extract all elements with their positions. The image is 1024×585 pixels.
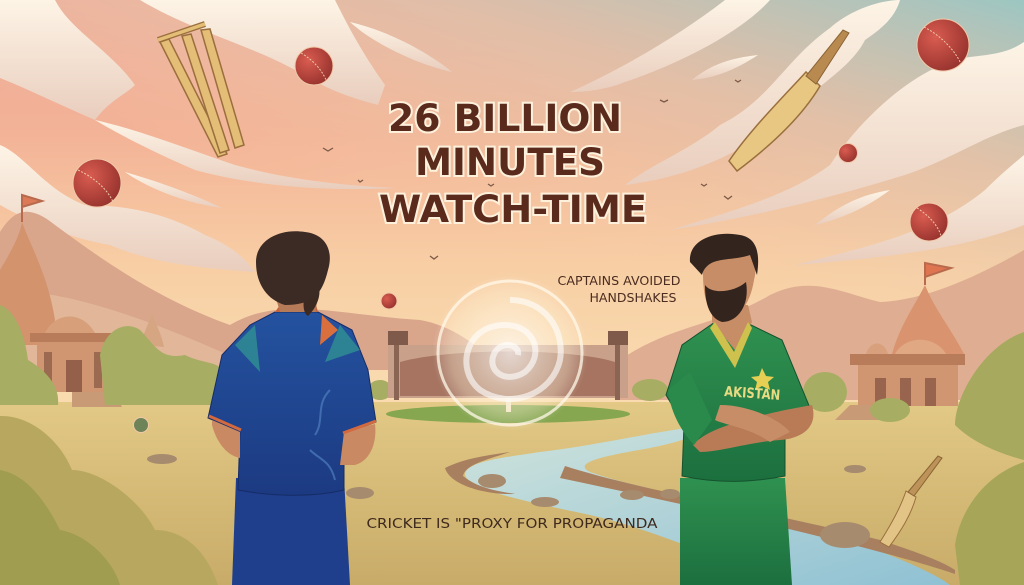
swirl <box>432 275 588 431</box>
callout: captains avoided handshakes: CAPTAINS AVOIDED <box>558 274 680 288</box>
title: MINUTES <box>415 141 605 184</box>
icon: wickets <box>158 24 244 157</box>
birds <box>323 80 741 259</box>
right temple <box>835 263 965 420</box>
caption: proxy for propaganda: CRICKET IS "PROXY FOR PROPAGANDA <box>366 516 658 532</box>
title: WATCH-TIME <box>379 188 647 231</box>
background sky <box>0 0 1024 450</box>
trees <box>0 305 910 422</box>
rocks <box>147 454 870 548</box>
foreground bushes <box>0 332 1024 585</box>
icon: bat <box>729 30 849 171</box>
left temple <box>0 195 164 407</box>
ground <box>0 402 1024 585</box>
figure: Pakistan player: AKISTAN <box>724 384 781 404</box>
callout: captains avoided handshakes <box>558 274 680 305</box>
clouds <box>0 0 1024 272</box>
stadium <box>386 331 630 423</box>
icon: small bat <box>880 456 942 547</box>
river <box>465 426 950 585</box>
figure: India player <box>208 231 376 585</box>
title <box>379 97 647 231</box>
icons: cricket balls <box>73 19 969 432</box>
mountains <box>0 212 1024 400</box>
river banks <box>445 452 955 574</box>
title: 26 BILLION <box>388 97 622 140</box>
callout: captains avoided handshakes: HANDSHAKES <box>590 291 676 305</box>
figure: Pakistan player <box>666 234 813 585</box>
